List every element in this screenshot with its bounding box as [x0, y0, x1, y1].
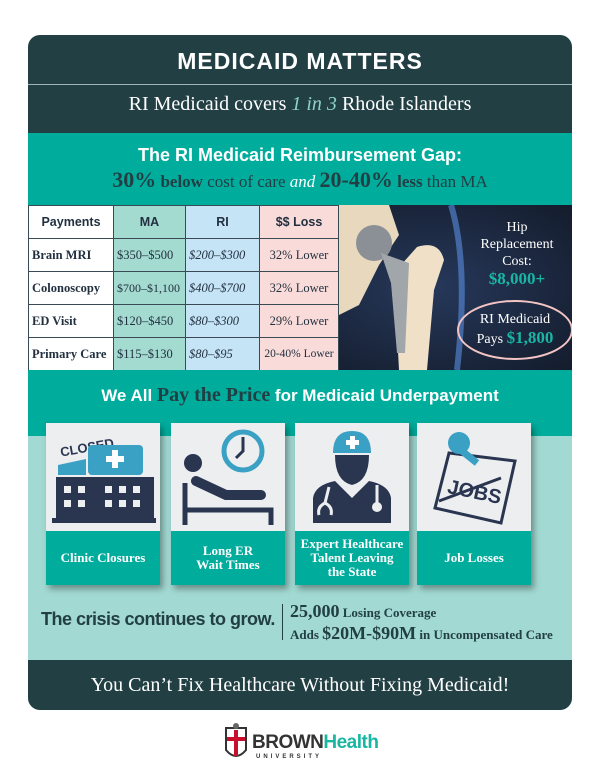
table: Colonoscopy [32, 280, 100, 294]
crisis stats: Adds $20M-$90M in Uncompensated Care [290, 623, 553, 643]
card: long ER wait times [171, 423, 285, 585]
hip cost text: Cost: [502, 254, 532, 269]
table: ED Visit [32, 314, 77, 328]
table: Primary Care [32, 346, 106, 360]
table: MA [140, 215, 159, 229]
table: $400–$700 [189, 280, 245, 294]
card: clinic closures: CLOSED [59, 435, 115, 460]
callout: RI Medicaid pays: RI Medicaid [480, 312, 550, 327]
card: job losses: Job Losses [444, 550, 504, 565]
crisis stats: 25,000 Losing Coverage [290, 601, 436, 621]
table: 32% Lower [270, 280, 328, 294]
table: Brain MRI [32, 248, 91, 262]
hip image panel [339, 205, 572, 370]
footer banner: You Can’t Fix Healthcare Without Fixing Medicaid! [91, 674, 509, 696]
card: clinic closures [46, 423, 160, 585]
card: long ER wait times: Long ER [203, 543, 253, 558]
card: talent leaving: Expert Healthcare [301, 536, 403, 551]
crisis stats [290, 601, 553, 643]
card: clinic closures: Clinic Closures [61, 550, 145, 565]
crisis statement: The crisis continues to grow. [41, 609, 275, 629]
card: talent leaving: Talent Leaving [311, 550, 393, 565]
hip cost text: Replacement [480, 237, 554, 252]
footer banner [28, 660, 572, 710]
hip cost text: Hip [506, 220, 528, 235]
card: talent leaving [295, 423, 409, 585]
card: job losses: JOBS [445, 476, 503, 509]
table: $120–$450 [117, 314, 173, 328]
table: 29% Lower [270, 314, 328, 328]
table: 20-40% Lower [264, 348, 334, 360]
table: $700–$1,100 [117, 280, 180, 294]
logo [225, 723, 378, 760]
logo: UNIVERSITY [256, 754, 322, 760]
table: $200–$300 [189, 248, 245, 262]
title: MEDICAID MATTERS [177, 48, 423, 74]
card: talent leaving: the State [328, 564, 376, 579]
callout: RI Medicaid pays: Pays $1,800 [477, 328, 553, 347]
table: 32% Lower [270, 248, 328, 262]
hip cost text: $8,000+ [489, 269, 545, 288]
header [28, 35, 572, 133]
table: $115–$130 [117, 346, 173, 360]
table: $80–$95 [189, 346, 233, 360]
callout: RI Medicaid pays [457, 300, 573, 360]
table: $350–$500 [117, 248, 173, 262]
price band [28, 370, 572, 436]
main card [28, 35, 572, 710]
table: $$ Loss [276, 215, 322, 229]
subtitle: RI Medicaid covers 1 in 3 Rhode Islanders [129, 93, 471, 115]
card: long ER wait times: Wait Times [196, 557, 260, 572]
table: RI [216, 215, 229, 229]
gap band [28, 133, 572, 205]
price heading: We All Pay the Price for Medicaid Underpayment [101, 384, 499, 406]
logo: BROWNHealth [252, 732, 378, 753]
card: job losses [417, 423, 531, 585]
hip cost text [480, 220, 554, 288]
table: $80–$300 [189, 314, 239, 328]
gap heading: The RI Medicaid Reimbursement Gap: [138, 145, 462, 165]
table: Payments [41, 215, 101, 229]
icon: hip bone [339, 205, 462, 370]
table [28, 205, 339, 370]
gap stats: 30% below cost of care and 20-40% less than MA [112, 167, 488, 192]
